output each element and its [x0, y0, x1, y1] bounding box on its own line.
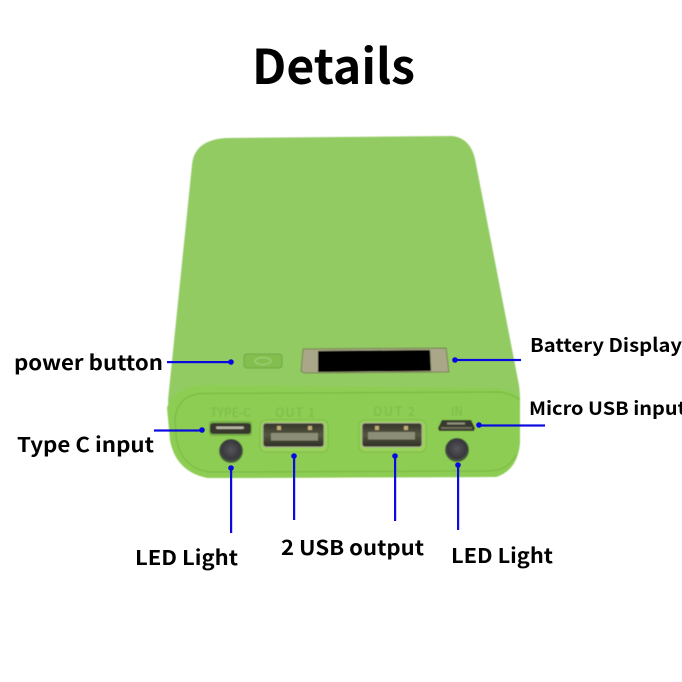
pointer: battery display [452, 357, 521, 363]
type-c label on device: TYPE-C [210, 402, 251, 421]
pointer: right led [455, 462, 461, 530]
label: micro usb input: Micro USB input [529, 395, 682, 421]
battery display [301, 348, 449, 373]
title: Details [252, 28, 415, 98]
left led light [219, 439, 243, 463]
in label on device: IN [451, 401, 463, 420]
out 2 label: OUT 2 [373, 401, 415, 420]
right led light [445, 438, 469, 462]
power bank device [167, 136, 520, 478]
out 1 label: OUT 1 [275, 402, 315, 421]
micro usb port [438, 420, 475, 431]
label: type c input: Type C input [17, 428, 154, 458]
label: 2 usb output: 2 USB output [281, 531, 424, 561]
pointer: left led [228, 465, 234, 533]
usb port 1 [260, 420, 328, 452]
pointer: usb 1 [291, 453, 297, 520]
device top body [168, 136, 520, 478]
power button [244, 354, 282, 368]
label: power button: power button [14, 346, 163, 376]
label: right led light: LED Light [451, 539, 553, 569]
usb port 2 [359, 420, 426, 452]
type-c port [209, 421, 252, 436]
label: battery display: Battery Display [530, 331, 682, 358]
pointer: power button [167, 359, 234, 365]
front inner outline [175, 392, 520, 472]
label: left led light: LED Light [135, 541, 238, 571]
pointer: micro usb [476, 422, 545, 428]
pointer: type c [154, 427, 205, 433]
pointer: usb 2 [392, 453, 398, 521]
front face [167, 385, 520, 478]
